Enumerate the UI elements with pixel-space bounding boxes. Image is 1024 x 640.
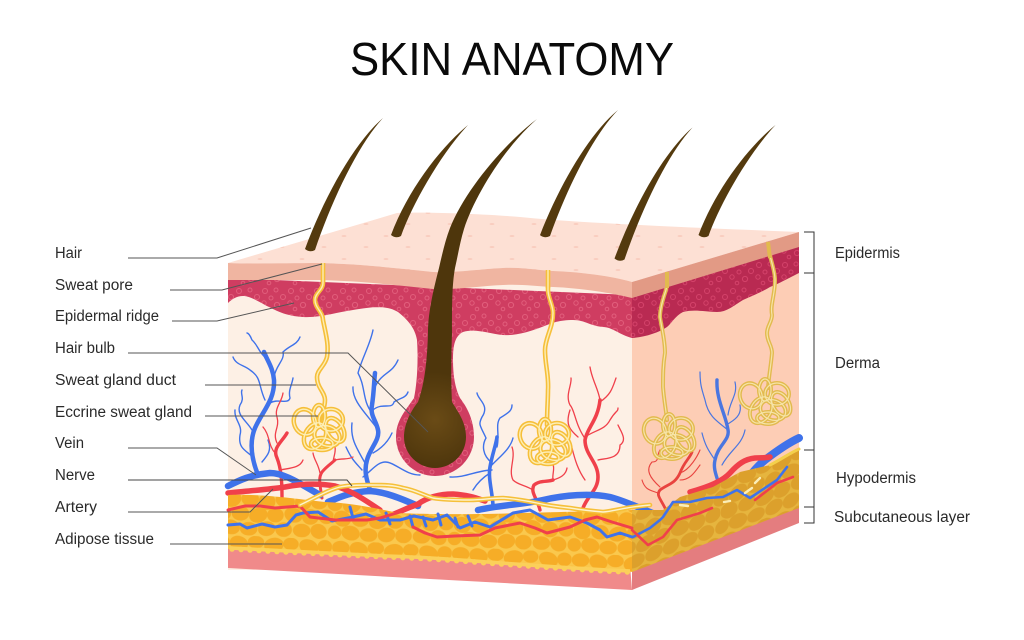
sweat pore tops redrawn over epidermis (323, 242, 770, 288)
front face: dermis background (228, 270, 632, 570)
label: Sweat pore: Sweat pore (55, 277, 133, 294)
blue veins: front trees (233, 330, 513, 505)
label: Hair bulb (55, 340, 428, 432)
main artery band (228, 457, 770, 518)
label: Sweat pore (55, 264, 322, 294)
label: Sweat gland duct: Sweat gland duct (55, 372, 177, 389)
label: Epidermal ridge (55, 303, 294, 325)
label: Epidermal ridge: Epidermal ridge (55, 308, 159, 325)
red capillaries (228, 477, 793, 545)
hair 3: long hair shaft with hair bulb (404, 119, 537, 468)
layer label: Epidermis: Epidermis (835, 245, 900, 262)
capillary network in fat (228, 467, 793, 545)
label: Adipose tissue: Adipose tissue (55, 531, 154, 548)
layer label: Derma: Derma (835, 355, 880, 372)
epidermis: side edge (632, 232, 799, 298)
vein tree 1 (233, 333, 300, 475)
layer label: Hypodermis: Hypodermis (836, 470, 916, 487)
layer bracket (804, 232, 814, 523)
eccrine sweat gland and duct 4 (side) (736, 242, 794, 427)
side papillary dermis (632, 245, 799, 338)
side face: dermis background (632, 247, 799, 574)
main vein band (228, 438, 799, 514)
side artery tree (642, 450, 700, 508)
label: Hair bulb: Hair bulb (55, 340, 115, 357)
label: Vein (55, 435, 256, 475)
subcutaneous layer: front (228, 545, 632, 590)
hair 1 (305, 118, 383, 251)
eccrine sweat gland and duct 1 (290, 263, 348, 453)
label: Nerve (55, 467, 352, 486)
vein tree 2 (346, 330, 420, 490)
side vein tree (700, 372, 745, 487)
skin pores (228, 213, 799, 282)
epidermis: front edge (228, 263, 632, 298)
hair 5 (614, 128, 692, 261)
side face blood vessels (642, 372, 745, 508)
artery tree 3 (511, 447, 567, 510)
vein tree 3 (450, 393, 513, 505)
label: Eccrine sweat gland: Eccrine sweat gland (55, 404, 192, 421)
label: Nerve: Nerve (55, 467, 95, 484)
artery tree 1 (263, 393, 303, 497)
subcutaneous layer: side (632, 504, 799, 590)
front papillary dermis with hair follicle sheath (228, 278, 632, 476)
hair 4 (540, 110, 618, 237)
hair 6 (698, 125, 776, 237)
eccrine sweat gland and duct 3 (side) (640, 272, 698, 462)
hair 2 (391, 125, 468, 237)
label: Hair: Hair (55, 245, 82, 262)
adipose tissue: side (632, 448, 799, 572)
red arteries: front trees (263, 367, 623, 510)
eccrine sweat gland and duct 2 (516, 270, 574, 467)
artery tree 4 (568, 367, 623, 508)
diagram: skin cross-section block (228, 110, 799, 590)
label: Artery: Artery (55, 499, 97, 516)
title: SKIN ANATOMY (350, 33, 674, 85)
label: Vein: Vein (55, 435, 84, 452)
blue capillaries (228, 467, 787, 537)
epidermis: skin top surface (228, 213, 799, 282)
label: Artery (55, 489, 273, 516)
adipose tissue: front (228, 495, 632, 572)
layer label: Subcutaneous layer: Subcutaneous layer (834, 509, 970, 526)
artery tree 2 (313, 447, 353, 498)
label: Hair (55, 228, 311, 262)
nerve (300, 449, 799, 512)
vein and artery bands (228, 438, 799, 518)
